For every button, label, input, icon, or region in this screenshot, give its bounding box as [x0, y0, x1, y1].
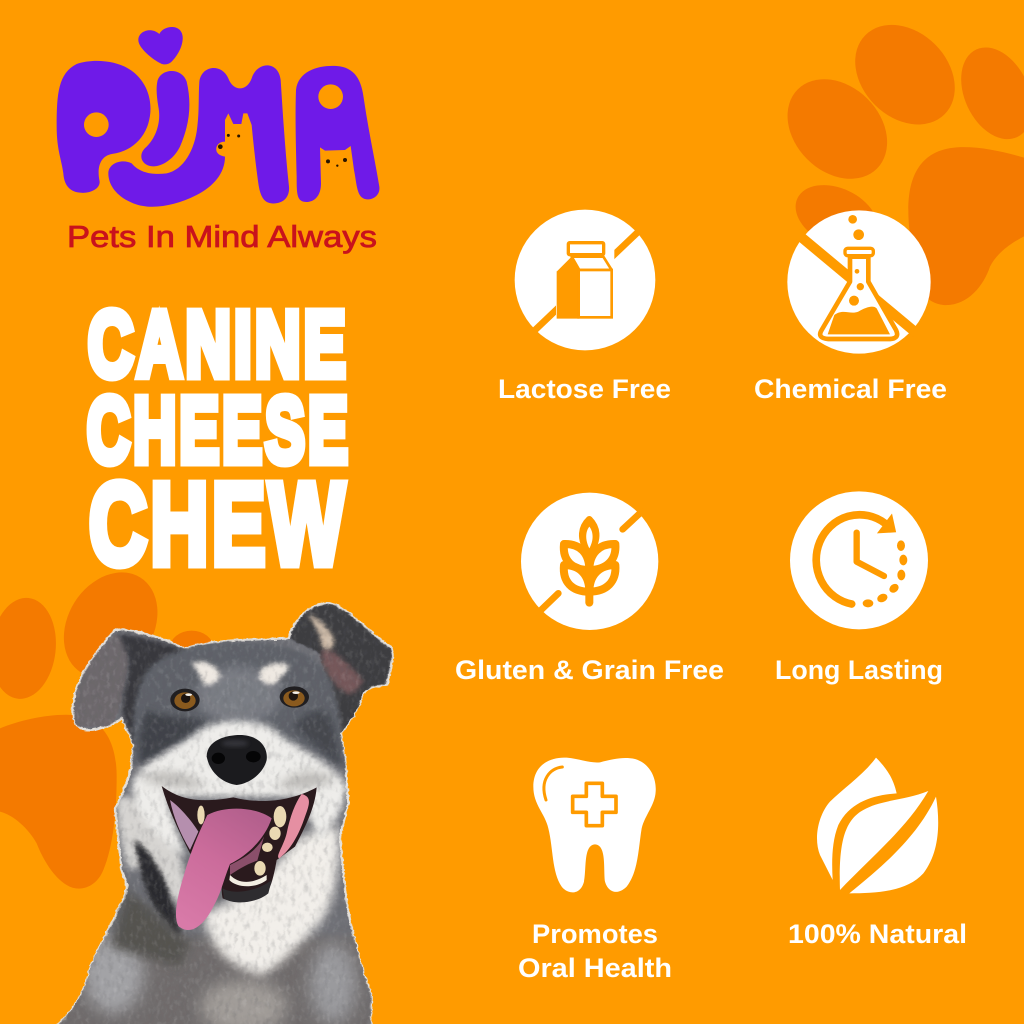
label: promotes oral health: Promotes — [532, 919, 658, 949]
logo letters J and M with dog cut-out — [108, 65, 289, 207]
white chest — [203, 827, 339, 975]
head grey — [133, 643, 347, 770]
lower mouth pink — [230, 837, 264, 875]
left eye — [170, 689, 200, 711]
icon: chemical free — [787, 210, 931, 354]
nose — [207, 735, 267, 785]
mouth interior — [162, 786, 317, 901]
title line: cheese: CHEESE — [87, 378, 351, 482]
logo letter I — [141, 71, 189, 166]
tongue — [176, 809, 272, 930]
cheek dark right — [293, 711, 342, 767]
left ear — [74, 633, 128, 727]
left ear base — [118, 633, 187, 750]
right body patch — [310, 943, 357, 1023]
lighter body patches — [83, 933, 143, 1013]
lower jaw — [223, 880, 272, 902]
light neck fur — [117, 796, 187, 903]
label: promotes oral health: Oral Health — [518, 953, 672, 983]
right lip — [278, 794, 309, 858]
dog fur and silhouette — [50, 597, 397, 1024]
logo: PIMA — [57, 27, 379, 207]
muzzle shading — [140, 772, 207, 788]
logo dog and cat faces — [218, 134, 347, 167]
grey neck lower — [110, 890, 190, 967]
label: gluten and grain free: Gluten & Grain Free — [455, 655, 724, 685]
title line: chew: CHEW — [89, 459, 348, 589]
label: long lasting: Long Lasting — [775, 655, 943, 685]
teeth — [197, 806, 286, 886]
left brow — [192, 662, 221, 685]
title line: canine: CANINE — [88, 292, 349, 396]
body — [50, 937, 377, 1024]
cheek dark left — [139, 710, 207, 767]
right ear tuft — [308, 613, 334, 650]
forehead mid-grey — [195, 667, 282, 723]
left lip — [170, 800, 198, 850]
muzzle shading right — [277, 772, 337, 789]
icon: gluten and grain free — [521, 493, 658, 630]
dog halo outline — [50, 603, 393, 1024]
icon: leaves — [817, 758, 938, 893]
label: 100% natural: 100% Natural — [788, 919, 967, 949]
logo letter P — [57, 61, 150, 193]
right ear inner — [322, 650, 363, 694]
dark fur speckle — [50, 597, 397, 1024]
label: promotes oral health — [518, 919, 672, 983]
product title — [87, 292, 351, 589]
logo letter A with cat cut-out — [296, 66, 379, 202]
dog photo — [50, 597, 397, 1024]
icon: long lasting — [790, 491, 928, 629]
tagline: Pets In Mind Always — [67, 219, 377, 254]
paw print: top right — [768, 5, 1024, 305]
right eye — [280, 686, 309, 708]
dog layers — [50, 597, 397, 1024]
label: lactose free: Lactose Free — [498, 374, 671, 404]
label: chemical free: Chemical Free — [754, 374, 947, 404]
muzzle white — [132, 721, 347, 857]
paw print: bottom left — [0, 555, 214, 889]
right ear dark — [290, 605, 391, 733]
dark neck stripe — [135, 840, 180, 937]
icon: lactose free — [515, 210, 655, 350]
right brow — [258, 663, 290, 685]
light fur speckle — [50, 597, 397, 1024]
centre chest mottling — [200, 980, 287, 1024]
icon: tooth — [533, 758, 656, 892]
logo heart — [138, 27, 183, 64]
